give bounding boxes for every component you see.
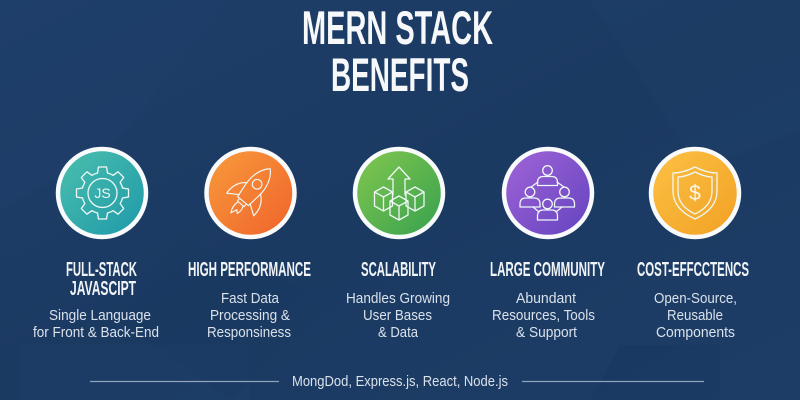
icon: gear with JS: [58, 149, 146, 237]
description: Responsiness: [207, 325, 291, 341]
description: [33, 308, 159, 341]
panel: large community: [490, 149, 605, 341]
panel: high performance: [188, 149, 311, 341]
description: [654, 291, 737, 341]
heading: HIGH PERFORMANCE: [188, 259, 311, 281]
panel: full-stack javascript: [33, 149, 159, 341]
title: BENEFITS: [331, 48, 469, 101]
description: [492, 291, 595, 341]
panel: scalability: [346, 149, 450, 341]
description: Resources, Tools: [492, 308, 595, 324]
description: for Front & Back-End: [33, 325, 159, 341]
icon: shield with dollar: [651, 149, 739, 237]
heading: [66, 259, 137, 300]
heading: LARGE COMMUNITY: [490, 259, 605, 281]
description: Components: [656, 325, 735, 341]
panel: cost-effectiveness: [637, 149, 749, 341]
icon: connected people: [504, 149, 592, 237]
description: Abundant: [516, 291, 576, 307]
footer: MongDod, Express.js, React, Node.js: [292, 374, 508, 390]
icon: cubes and arrow: [355, 149, 443, 237]
description: Processing &: [210, 308, 290, 324]
description: Handles Growing: [346, 291, 450, 307]
description: Fast Data: [221, 291, 280, 307]
description: Reusable: [667, 308, 723, 324]
description: User Bases: [363, 308, 432, 324]
description: & Support: [516, 325, 577, 341]
description: [207, 291, 291, 341]
icon: gear with JS: JS: [94, 185, 111, 201]
heading: JAVASCIPT: [70, 278, 136, 300]
icon: shield with dollar: $: [689, 182, 701, 205]
heading: SCALABILITY: [361, 259, 436, 281]
description: Open-Source,: [654, 291, 737, 307]
icon: rocket: [206, 149, 294, 237]
heading: FULL-STACK: [66, 259, 137, 281]
description: [346, 291, 450, 341]
title: [302, 1, 493, 101]
title: MERN STACK: [302, 1, 493, 54]
description: Single Language: [49, 308, 151, 324]
description: & Data: [378, 325, 419, 341]
